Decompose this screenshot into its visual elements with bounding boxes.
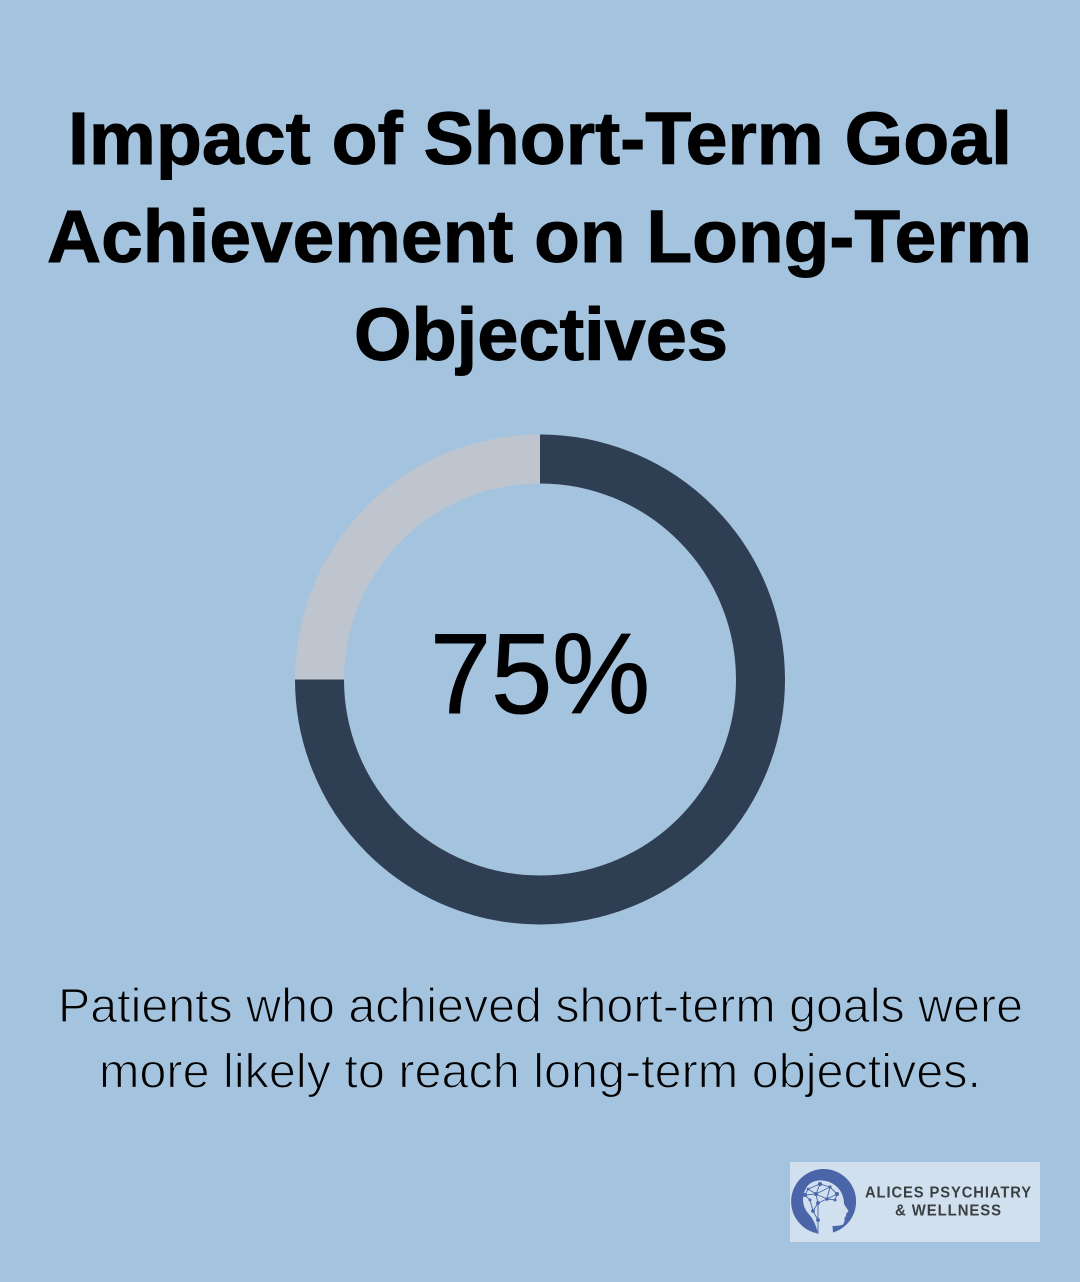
title [47, 97, 1032, 376]
title: Achievement on Long-Term [47, 195, 1032, 278]
description text: more likely to reach long-term objectives. [99, 1046, 981, 1098]
logo text: & WELLNESS [895, 1202, 1002, 1220]
logo badge [790, 1162, 1040, 1242]
donut chart: 75% [320, 459, 760, 900]
percentage value: 75% [430, 611, 650, 738]
logo text [865, 1184, 1032, 1220]
title: Impact of Short-Term Goal [68, 97, 1012, 180]
description text [58, 980, 1023, 1098]
icon: head with brain network [791, 1169, 856, 1234]
title: Objectives [354, 293, 728, 376]
logo text: ALICES PSYCHIATRY [865, 1184, 1032, 1202]
description text: Patients who achieved short-term goals were [58, 980, 1023, 1033]
